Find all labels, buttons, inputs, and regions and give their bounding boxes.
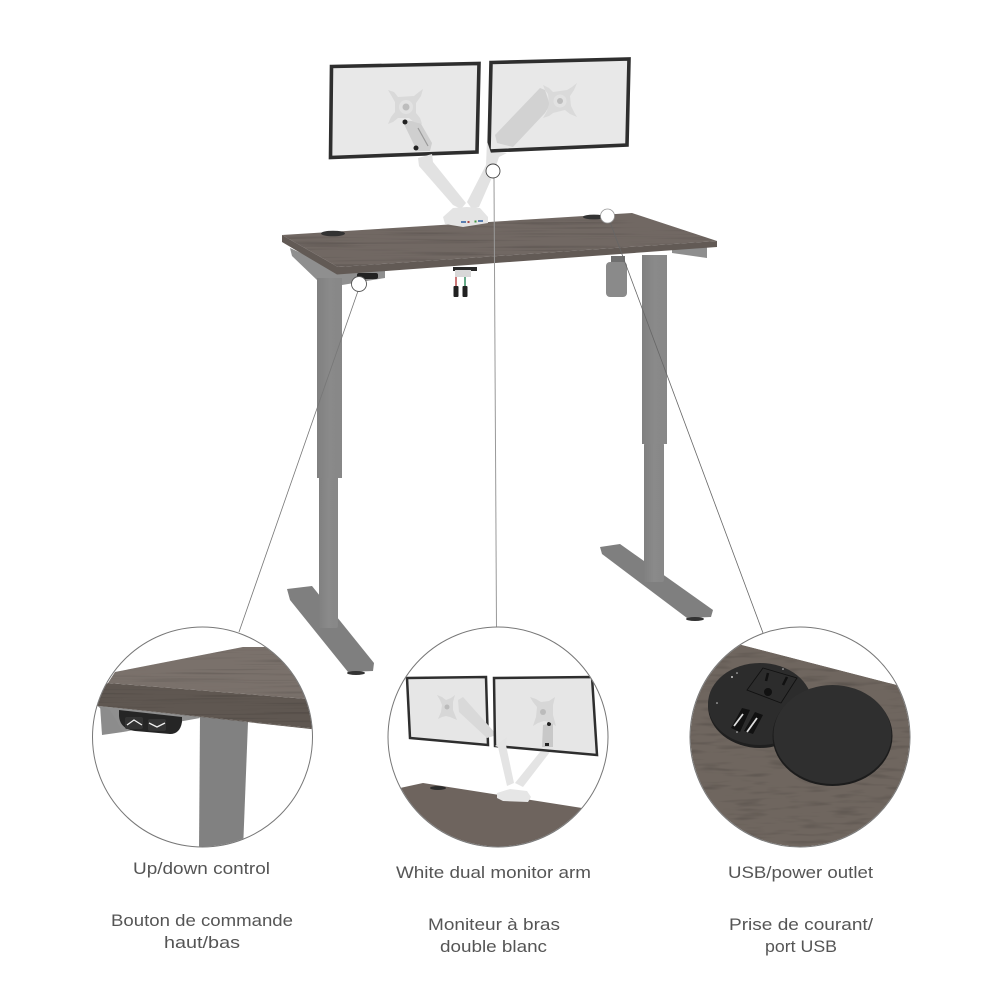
label: haut/bas: haut/bas xyxy=(164,933,240,952)
cover disc xyxy=(772,685,892,786)
under-desk rail: left xyxy=(290,248,385,285)
monitor base with ports xyxy=(443,207,488,227)
under-desk rail: right xyxy=(672,246,707,258)
callout line: outlet xyxy=(610,222,763,633)
callout line: monitor arm xyxy=(494,178,496,627)
desktop xyxy=(282,213,717,274)
cup holder xyxy=(606,256,627,297)
marker: outlet xyxy=(600,209,614,223)
leg: right xyxy=(600,255,713,621)
panel: up/down control detail xyxy=(90,627,325,850)
monitor: left xyxy=(330,64,479,158)
label: moniteur à bras: Moniteur à bras xyxy=(428,915,560,934)
marker: control xyxy=(352,276,366,292)
label: port USB: port USB xyxy=(765,937,837,956)
callout line: control xyxy=(239,291,358,632)
panel: USB/power outlet detail xyxy=(690,626,910,848)
under-desk control xyxy=(357,273,378,279)
monitor arm: right mount xyxy=(495,83,577,147)
grommet: right xyxy=(583,215,605,219)
label: white dual monitor arm: White dual monitor arm xyxy=(396,863,591,882)
outlet disc xyxy=(708,663,812,748)
desk illustration xyxy=(282,59,717,675)
control buttons xyxy=(119,710,182,734)
grommet: left xyxy=(321,231,345,236)
leg: left xyxy=(287,278,374,675)
under-desk ports and cables xyxy=(453,267,477,297)
label: bouton de commande: Bouton de commande xyxy=(111,911,293,930)
label: double blanc: double blanc xyxy=(440,937,548,956)
monitor arm: left mount xyxy=(388,89,432,151)
monitor: right xyxy=(489,59,629,151)
label: up/down control: Up/down control xyxy=(133,859,270,878)
monitor arm: lower arms xyxy=(418,141,507,209)
marker: monitor arm xyxy=(486,164,500,178)
panel: monitor arm detail xyxy=(388,627,610,860)
label: USB/power outlet: USB/power outlet xyxy=(728,863,873,882)
label: prise de courant: Prise de courant/ xyxy=(729,915,873,934)
